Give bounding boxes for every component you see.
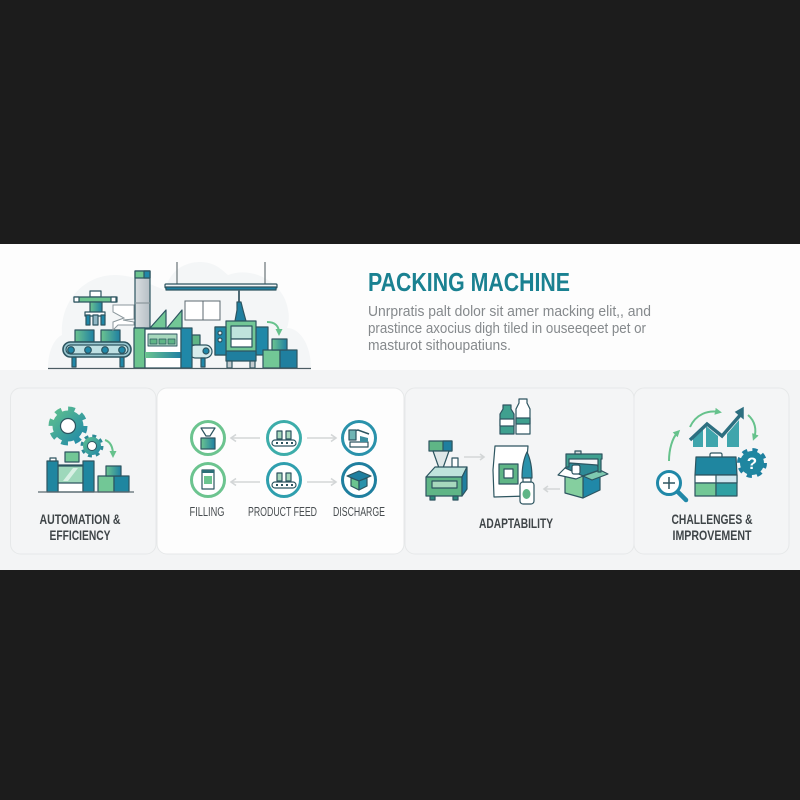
label: IMPROVEMENT <box>672 527 752 543</box>
icon: toolbox <box>695 453 737 496</box>
card: challenges and improvement <box>634 388 789 554</box>
description text: masturot sithoupatiuns. <box>368 338 511 354</box>
icon: filling machine <box>426 441 467 500</box>
description text <box>368 304 651 354</box>
panel: header band <box>0 244 800 370</box>
step: open box <box>342 464 376 496</box>
card: automation and efficiency <box>10 388 156 554</box>
robot arm <box>74 291 117 325</box>
window <box>185 301 220 320</box>
curved arrows <box>669 412 755 461</box>
arrows between steps <box>231 434 336 486</box>
icon: question gear <box>739 450 765 476</box>
finished boxes <box>263 339 297 368</box>
label: CHALLENGES & <box>672 511 752 527</box>
icon: machine <box>47 452 94 492</box>
arrow: box to bag <box>544 486 560 492</box>
card: process steps <box>157 388 404 554</box>
arrow: machine to bag <box>464 454 484 460</box>
icon: large gear <box>51 409 85 443</box>
conveyor with boxes <box>63 330 131 367</box>
sealing machine <box>215 290 268 368</box>
factory body <box>134 328 212 368</box>
hero illustration: packing line <box>48 262 311 368</box>
step: conveyor bottom <box>268 464 300 496</box>
step: hopper <box>192 422 224 454</box>
factory roof <box>150 310 182 328</box>
arrow: into box <box>267 322 279 333</box>
panel: lower band <box>0 370 800 570</box>
arrow: gear to boxes <box>105 440 113 455</box>
card: adaptability <box>405 388 634 554</box>
floor line <box>48 368 311 370</box>
label: AUTOMATION & <box>40 511 120 527</box>
icon: small gear <box>82 436 102 456</box>
chimney <box>135 271 150 328</box>
baseline <box>38 491 134 493</box>
step labels: FILLING <box>190 504 224 519</box>
icon: magnifier <box>658 472 686 500</box>
icon: bottles <box>500 399 530 434</box>
gripper bracket <box>113 305 134 330</box>
icon: trend chart <box>690 408 743 447</box>
step: packing robot <box>342 422 376 454</box>
description text: Unrpratis palt dolor sit amer macking elit,, and <box>368 304 651 320</box>
icon: bag <box>493 446 528 497</box>
step labels: DISCHARGE <box>333 504 385 519</box>
step labels <box>190 504 385 519</box>
step: bag <box>192 464 224 496</box>
step: conveyor top <box>268 422 300 454</box>
backdrop cloud <box>48 262 311 368</box>
title: PACKING MACHINE <box>368 267 570 297</box>
icon: dropper bottle <box>520 452 534 504</box>
icon: question gear: ? <box>747 454 757 473</box>
description text: prastince axocius digh tiled in ouseeqeet pet or <box>368 321 646 337</box>
label: EFFICIENCY <box>50 527 111 543</box>
ceiling gantry <box>165 262 277 290</box>
icon: open box with frame <box>558 451 608 498</box>
label: ADAPTABILITY <box>479 515 553 531</box>
step labels: PRODUCT FEED <box>248 504 317 519</box>
icon: boxes <box>98 466 129 492</box>
